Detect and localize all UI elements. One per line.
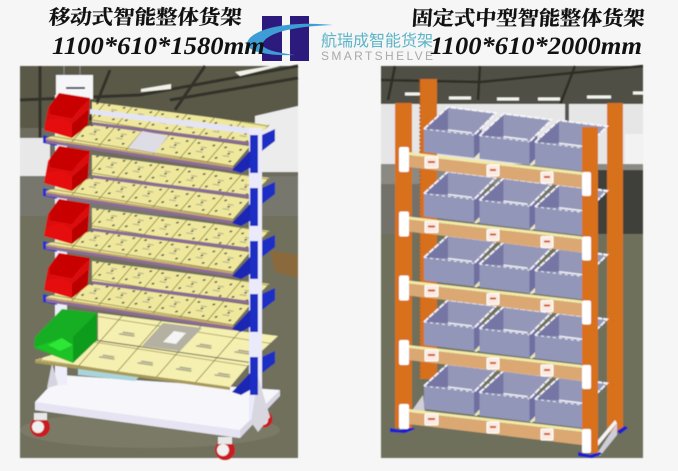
front beams with labels [399, 147, 591, 453]
right title: 固定式中型智能整体货架 [411, 7, 646, 30]
logo text [321, 32, 433, 63]
shelf tier 4 [43, 261, 270, 330]
logo text: 航瑞成智能货架 [321, 32, 433, 50]
bottom shelf [35, 313, 278, 390]
panel: mobile shelf rack [20, 66, 298, 460]
front orange uprights [395, 103, 598, 453]
shelf tier 1 [43, 102, 270, 171]
red bins [44, 93, 90, 298]
label holder under bottom shelf [78, 368, 139, 381]
left upright and gusset [47, 95, 67, 388]
lower deck frame [411, 395, 617, 456]
right upright [249, 128, 270, 432]
bins level 4 [424, 300, 607, 365]
back orange uprights [420, 79, 623, 432]
base plate [35, 375, 280, 438]
left title [48, 6, 265, 60]
shelf tier 3 [43, 208, 270, 277]
blue feet [390, 426, 628, 458]
warehouse background right [381, 66, 643, 458]
left title: 1100*610*1580mm [52, 33, 265, 60]
right title: 1100*610*2000mm [430, 33, 642, 60]
shelf tier 2 [43, 155, 270, 224]
panel: fixed medium shelf rack [381, 66, 643, 458]
hanging sign [56, 66, 93, 99]
right title [411, 7, 646, 60]
blue brackets [232, 129, 275, 395]
bins level 2 [424, 172, 607, 237]
warehouse background left [20, 66, 298, 458]
left title: 移动式智能整体货架 [48, 6, 243, 29]
bins level 5 [424, 364, 607, 429]
logo: blue H and swoosh [247, 16, 333, 61]
casters [30, 410, 272, 460]
logo text: SMARTSHELVE [321, 49, 433, 63]
green bin [34, 309, 97, 363]
bins level 1 [424, 107, 607, 172]
bins level 3 [424, 236, 607, 301]
